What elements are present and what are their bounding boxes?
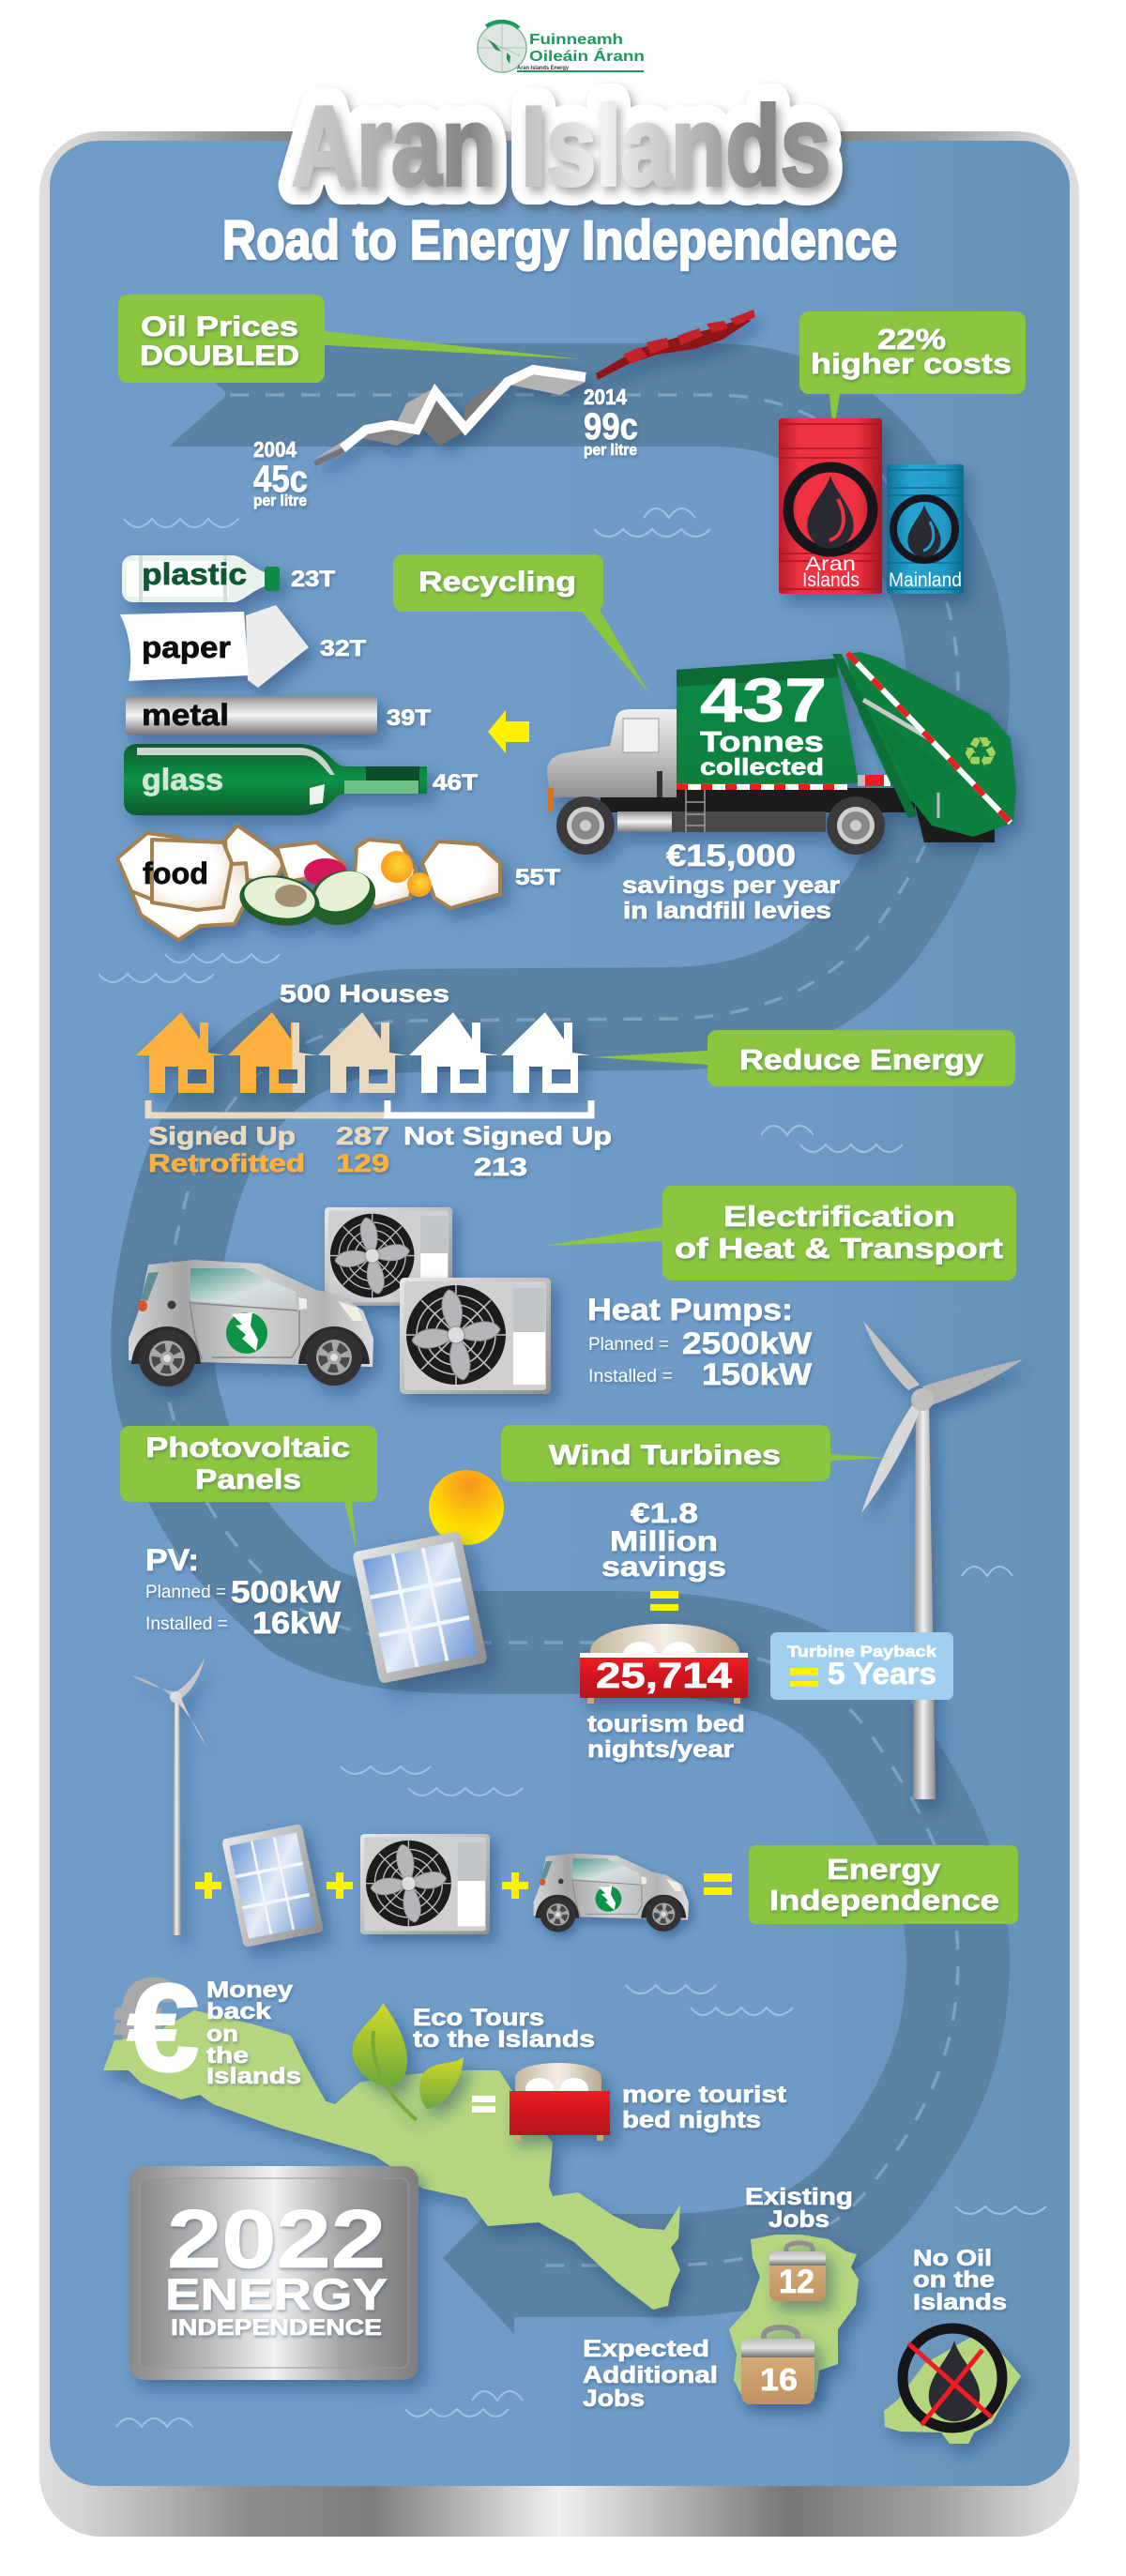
callout: electrification of heat and transport [542,1186,1016,1280]
text: expected additional jobs: Additional [583,2362,718,2388]
callout: oil prices doubled: Oil Prices [141,311,298,342]
text: money back on the islands: back [206,1999,272,2024]
text: pv capacity: Installed = [145,1614,228,1634]
text: savings: €1.8 [631,1498,698,1529]
icon: blue barrel [887,464,964,594]
callout: 22% higher costs [799,311,1026,434]
text: money back on the islands [206,1977,301,2089]
legend: signed up: 129 [336,1149,389,1177]
text: savings: Million [610,1526,718,1557]
legend: signed up: Signed Up [148,1122,296,1150]
text: eco tours: to the Islands [413,2026,595,2053]
text: money back on the islands: Money [206,1977,294,2003]
callout: photovoltaic panels: Panels [195,1464,301,1495]
icon: glass bottle: glass [142,763,223,796]
callout: 22% higher costs: 22% [877,323,946,356]
text: eco tours [413,2005,595,2053]
callout: electrification of heat and transport: Electrification [723,1200,955,1233]
callout: energy independence: Energy [827,1853,941,1886]
text: eco tours: Eco Tours [413,2005,544,2031]
label: 2004 price: 45c [253,459,308,500]
title: Aran Islands: Aran Islands [292,83,830,209]
legend: not signed up: 213 [474,1153,527,1181]
icon: euro: € [128,1959,199,2097]
callout: turbine payback [770,1632,953,1700]
label: paper tonnage: 32T [320,636,366,661]
icon: red barrel: Aran [805,553,856,575]
icon: not signed up house [409,1012,498,1093]
panel: recycling [117,554,1016,940]
icon: equals [650,1591,678,1611]
text: landfill savings: savings per year [622,872,840,899]
text: bed nights: tourism bed [587,1711,745,1737]
text: landfill savings [622,839,840,924]
text: existing jobs: Jobs [768,2206,829,2233]
subtitle: Road to Energy Independence [222,210,897,271]
icon: briefcase 12 [769,2243,826,2301]
bracket: not signed up [388,1100,591,1115]
legend: signed up: 287 [336,1122,389,1150]
text: heat pumps: Heat Pumps: [587,1293,793,1326]
icon: signed up house [318,1012,407,1093]
callout: energy independence [749,1845,1018,1924]
callout: recycling: Recycling [418,567,576,598]
callout: oil prices doubled: DOUBLED [140,341,299,371]
callout: oil prices doubled [118,295,582,383]
text: 437 tonnes collected: Tonnes [700,725,824,758]
icon: plastic bottle: plastic [142,557,247,591]
text: 437 tonnes collected [700,665,827,780]
logo: Fuinneamh [529,32,623,48]
text: expected additional jobs: Jobs [583,2386,645,2412]
badge: 2022 energy independence: ENERGY [165,2269,388,2319]
badge: 2022 energy independence: INDEPENDENCE [171,2315,382,2341]
legend: signed up: Retrofitted [148,1149,305,1177]
icon: paper [120,605,309,688]
callout: wind turbines [501,1425,890,1481]
truck cab [547,709,677,811]
text: no oil on the islands: Islands [913,2290,1007,2315]
badge: 2022 energy independence [129,2166,418,2380]
icon: briefcase 16 [741,2327,814,2404]
callout: 22% higher costs: higher costs [811,347,1012,380]
map: main island [103,2010,680,2310]
icon: metal bar [126,696,377,735]
logo: Aran Islands Energy [517,66,570,71]
text: no oil on the islands [913,2246,1007,2315]
badge: 2022 energy independence: 2022 [167,2192,386,2285]
text: heat pumps: 150kW [702,1357,813,1391]
text: pv capacity: 500kW [231,1575,342,1609]
icon: briefcase 16: 16 [760,2362,798,2397]
icon: bed 25,714 [580,1624,748,1704]
icon: electric car [129,1260,373,1386]
text: money back on the islands: Islands [206,2064,301,2089]
icon: plastic bottle [122,555,280,602]
text: more tourist bed nights [622,2082,787,2133]
panel: oil prices [118,295,1026,594]
icon: not signed up house [501,1012,590,1093]
icon: sun [429,1470,504,1545]
text: expected additional jobs [583,2336,718,2412]
label: 2014 price: 2014 [584,385,627,409]
icon: food waste: food [143,856,208,890]
label: plastic tonnage: 23T [291,567,335,592]
icon: bed [510,2063,610,2141]
text: pv capacity: PV: [145,1543,199,1577]
icon: no oil [884,2328,1021,2444]
callout: turbine payback: 5 Years [828,1657,936,1690]
icon: glass bottle [124,744,427,815]
label: 2004 price [253,437,308,509]
icon: plus [502,1872,528,1899]
waves [99,508,1046,2427]
logo [478,22,645,72]
icon: heat pump small [360,1834,490,1934]
road [162,343,958,2334]
panel: wind and solar [120,1321,1023,1799]
legend: not signed up [403,1122,612,1181]
icon: partly retrofitted house [228,1012,317,1093]
truck body [677,659,894,790]
label: 2014 price [584,385,638,459]
callout: photovoltaic panels: Photovoltaic [145,1432,350,1463]
icon: red barrel [779,418,882,594]
icon: metal bar: metal [142,698,229,732]
text: no oil on the islands: on the [913,2267,995,2293]
icon: red barrel: Islands [802,569,860,591]
icon: recycling truck [547,652,1016,855]
icon: solar panel [352,1531,488,1684]
callout: reduce energy: Reduce Energy [739,1043,984,1076]
icon: paper: paper [142,630,231,664]
text: landfill savings: €15,000 [666,839,796,872]
icon: car small [534,1854,689,1932]
callout: energy independence: Independence [769,1884,999,1917]
logo: Oileáin Árann [529,47,645,65]
title: Aran Islands: Aran Islands [292,83,830,209]
icon: globe [478,22,526,72]
label: 2004 price: per litre [253,492,307,509]
text: heat pumps [587,1293,813,1391]
label: food tonnage: 55T [515,865,560,890]
callout: wind turbines: Wind Turbines [549,1440,781,1471]
icon: heat pump back [325,1207,452,1306]
icon: briefcase 12: 12 [779,2264,814,2300]
text: 437 tonnes collected: 437 [700,665,827,735]
callout: reduce energy [592,1030,1015,1086]
text: pv capacity [145,1543,342,1640]
icon: plus [195,1872,221,1899]
panel: electrification [129,1186,1016,1394]
text: expected additional jobs: Expected [583,2336,709,2362]
text: heat pumps: 2500kW [682,1326,813,1360]
map: jobs island [729,2235,859,2395]
icon: heat pump front [400,1278,551,1394]
arrow: yellow [488,710,529,753]
truck compactor: ♻ [962,729,998,777]
label: 2014 price: per litre [584,441,637,459]
panel: energy independence equation [131,1658,1018,1947]
icon: food waste [117,826,500,940]
text: heat pumps: Installed = [588,1367,673,1386]
callout: photovoltaic panels [120,1426,377,1551]
label: glass tonnage: 46T [433,770,478,796]
text: savings [601,1498,726,1583]
text: bed nights: nights/year [587,1736,734,1763]
text: bed nights [587,1711,745,1763]
label: metal tonnage: 39T [387,705,431,731]
label: 2004 price: 2004 [253,437,297,462]
text: 437 tonnes collected: collected [700,754,824,780]
icon: plus [327,1872,353,1899]
icon: bed 25,714: 25,714 [596,1657,732,1696]
icon: euro back: € [114,1953,184,2090]
text: existing jobs: Existing [745,2184,853,2210]
icon: large wind turbine [861,1321,1023,1799]
icon: solar panel small [221,1824,324,1947]
text: money back on the islands: on [206,2022,238,2047]
icon: small wind turbine [131,1658,206,1935]
truck chassis [601,788,995,842]
legend: signed up [148,1122,389,1177]
callout: electrification of heat and transport: of Heat & Transport [675,1232,1003,1265]
bracket: signed up [148,1100,388,1115]
text: existing jobs [745,2184,853,2233]
icon: equals white [472,2096,495,2113]
panel: reduce energy [136,979,1015,1181]
panel: benefits [103,1953,1021,2444]
text: landfill savings: in landfill levies [623,898,831,924]
line chart: oil price rise [313,310,755,466]
truck wheels [556,796,885,855]
legend: not signed up: Not Signed Up [403,1122,612,1150]
icon: blue barrel: Mainland [889,569,962,591]
icon: equals [704,1873,732,1895]
heading: 500 houses: 500 Houses [280,979,449,1008]
truck compactor [832,652,1016,837]
text: heat pumps: Planned = [588,1335,669,1355]
text: more tourist bed nights: more tourist [622,2082,787,2108]
text: pv capacity: Planned = [145,1583,226,1602]
callout: turbine payback: Turbine Payback [787,1643,937,1660]
callout: recycling [393,554,649,694]
icon: retrofitted house [136,1012,225,1093]
text: no oil on the islands: No Oil [913,2246,992,2271]
label: 2014 price: 99c [584,406,638,447]
icon: leaves [352,2003,464,2120]
text: more tourist bed nights: bed nights [622,2107,761,2133]
text: savings: savings [601,1552,726,1583]
text: pv capacity: 16kW [252,1606,342,1640]
text: money back on the islands: the [206,2043,249,2068]
